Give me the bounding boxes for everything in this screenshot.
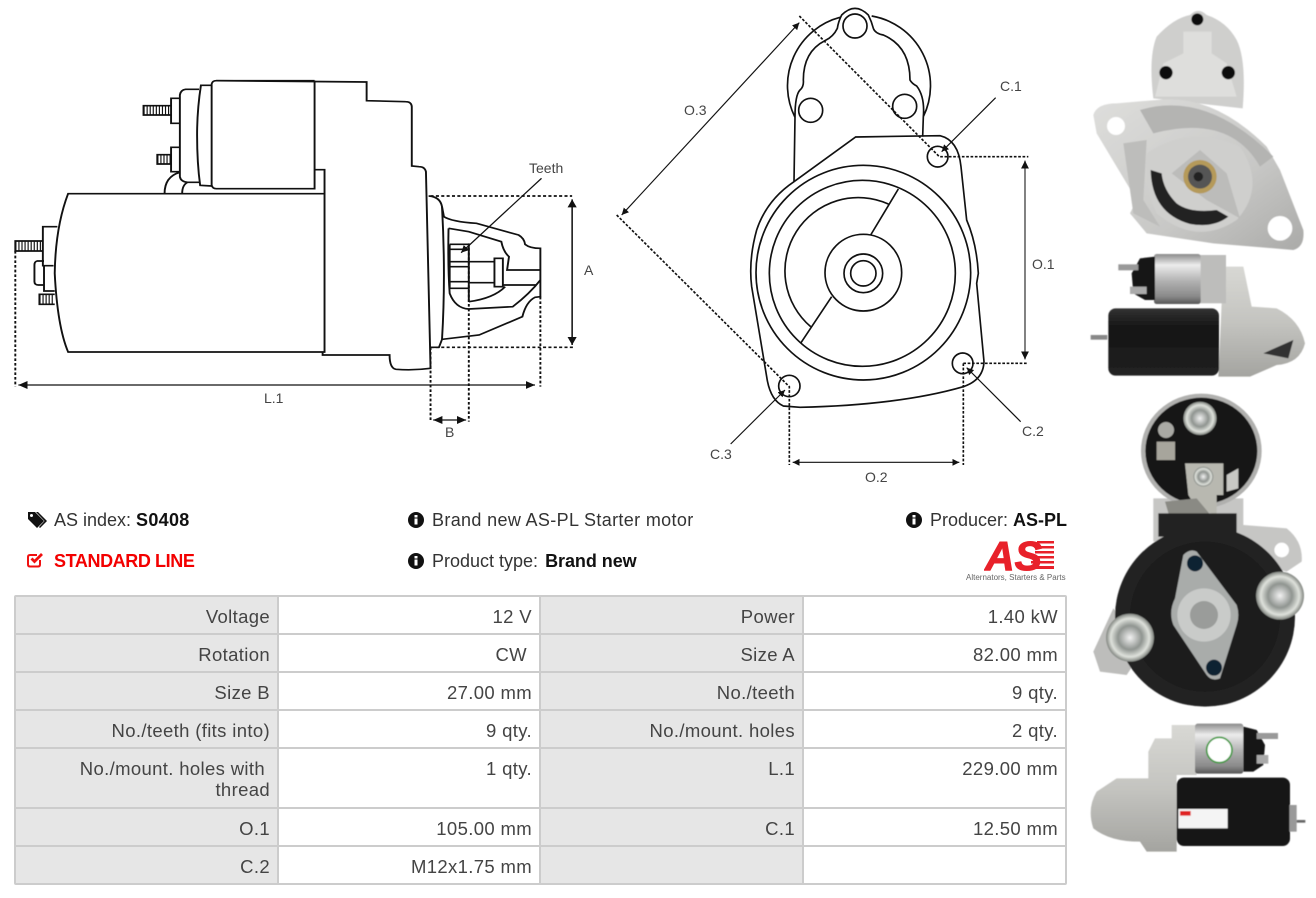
row: Size B and teeth: [16, 673, 1065, 709]
side view dimension labels: [264, 160, 594, 440]
front view dimension labels: C.2: [1022, 423, 1044, 439]
icon: info: [906, 512, 922, 528]
specification table: [14, 595, 1067, 885]
front view dimension labels: C.1: [1000, 78, 1022, 94]
rear terminals: [15, 227, 57, 304]
row: Voltage and Power: Power: [741, 606, 795, 627]
side view dimension labels: B: [445, 424, 454, 440]
dimension lines front view: [617, 16, 1028, 465]
row: teeth fits and mount holes: 9 qty.: [486, 720, 532, 741]
row: Rotation and Size A: 82.00 mm: [973, 644, 1058, 665]
standard line text: STANDARD LINE: [54, 551, 194, 571]
side view dimension labels: Teeth: [529, 160, 563, 176]
photo: side view one: [1091, 254, 1305, 377]
icon: info: [408, 553, 424, 569]
dimension lines side view: [15, 178, 574, 422]
row: threaded holes and L.1: thread: [215, 779, 270, 800]
row: Size B and teeth: 27.00 mm: [447, 682, 532, 703]
motor housing: [55, 194, 325, 352]
row: teeth fits and mount holes: 2 qty.: [1012, 720, 1058, 741]
brand new text: Brand new AS-PL Starter motor: [432, 510, 694, 530]
side view dimension labels: L.1: [264, 390, 284, 406]
concentric nose circles: [756, 165, 971, 380]
mount holes: [779, 146, 973, 397]
row: teeth fits and mount holes: No./teeth (fits into): [112, 720, 270, 741]
row: teeth fits and mount holes: [16, 711, 1065, 747]
row: threaded holes and L.1: 229.00 mm: [962, 758, 1058, 779]
pinion nose: [429, 196, 540, 347]
rear holes: [799, 14, 917, 122]
icon: info: [408, 512, 424, 528]
front view dimension labels: C.3: [710, 446, 732, 462]
icon: tags: [28, 512, 47, 528]
side view line drawing: [15, 81, 574, 422]
front view line drawing: [617, 8, 1028, 465]
row: threaded holes and L.1: L.1: [768, 758, 795, 779]
photo: rear view with solenoid end: [1093, 394, 1304, 707]
photo: top view of nose: [1093, 11, 1304, 250]
row: O.1 and C.1: O.1: [239, 818, 270, 839]
AS logo: [966, 539, 1066, 582]
icon: red checkbox: [27, 553, 43, 568]
solenoid: [144, 81, 325, 194]
logo tagline: Alternators, Starters & Parts: [966, 573, 1066, 582]
row: Voltage and Power: Voltage: [206, 606, 270, 627]
row: O.1 and C.1: 12.50 mm: [973, 818, 1058, 839]
row: Voltage and Power: 12 V: [493, 606, 532, 627]
row: Rotation and Size A: Rotation: [198, 644, 270, 665]
front view dimension labels: [684, 78, 1055, 485]
front view dimension labels: O.1: [1032, 256, 1055, 272]
drive end housing: [216, 81, 431, 370]
row: Size B and teeth: 9 qty.: [1012, 682, 1058, 703]
row: threaded holes and L.1: [16, 749, 1065, 807]
row: Voltage and Power: [16, 597, 1065, 633]
row: threaded holes and L.1: No./mount. holes with: [80, 758, 265, 779]
AS index row: [28, 510, 190, 530]
row: Rotation and Size A: [16, 635, 1065, 671]
row: C.2: [16, 847, 1065, 883]
mounting flange: [751, 136, 984, 407]
row: threaded holes and L.1: 1 qty.: [486, 758, 532, 779]
AS index text: AS index: S0408: [54, 510, 190, 530]
row: Rotation and Size A: CW: [495, 644, 527, 665]
row: Size B and teeth: Size B: [214, 682, 270, 703]
row: Size B and teeth: No./teeth: [717, 682, 795, 703]
row: O.1 and C.1: [16, 809, 1065, 845]
producer info: [906, 510, 1067, 530]
row: O.1 and C.1: C.1: [765, 818, 795, 839]
rear lobes: [787, 8, 930, 182]
row: teeth fits and mount holes: No./mount. holes: [650, 720, 795, 741]
row: C.2: M12x1.75 mm: [411, 856, 532, 877]
side view dimension labels: A: [584, 262, 594, 278]
producer text: Producer: AS-PL: [930, 510, 1067, 530]
product type text: Product type: Brand new: [432, 551, 637, 571]
row: O.1 and C.1: 105.00 mm: [436, 818, 532, 839]
row: Voltage and Power: 1.40 kW: [988, 606, 1058, 627]
product type info: [408, 551, 637, 571]
brand new info: [408, 510, 694, 530]
front view dimension labels: O.2: [865, 469, 888, 485]
row: Rotation and Size A: Size A: [740, 644, 795, 665]
standard line badge: [27, 551, 194, 571]
row: C.2: C.2: [240, 856, 270, 877]
front view dimension labels: O.3: [684, 102, 707, 118]
photo: side view two: [1091, 724, 1305, 852]
